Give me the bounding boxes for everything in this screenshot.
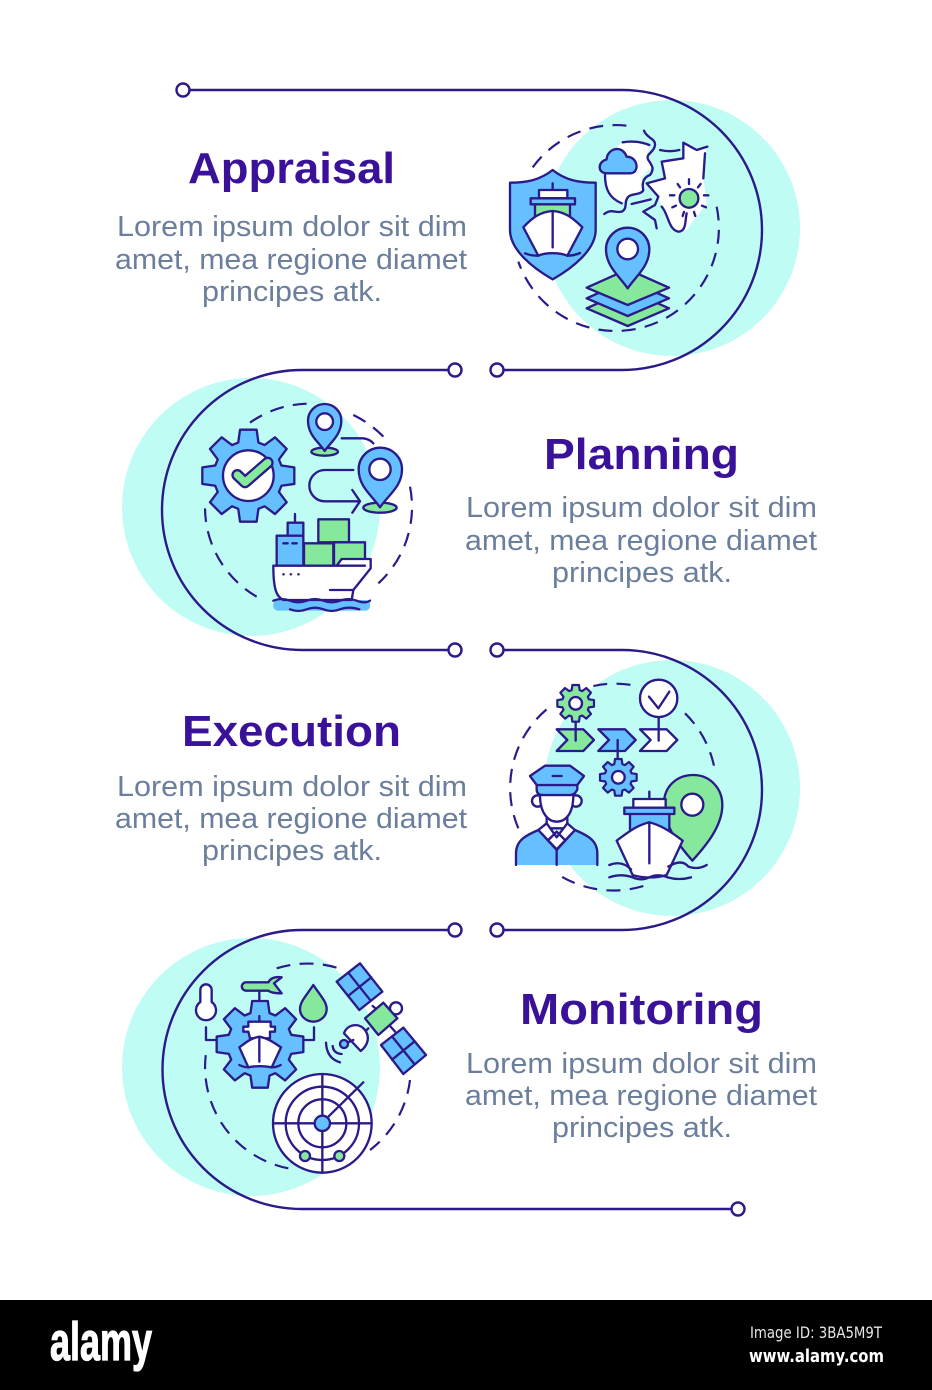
footer: watermark bar xyxy=(0,1300,932,1390)
icon: ship with green location pin xyxy=(609,775,722,879)
image id text: Image ID: 3BA5M9T xyxy=(750,1323,882,1342)
text block: Planning description: principes atk. xyxy=(552,557,732,589)
icon: gear with ship and sensors xyxy=(196,977,327,1088)
icon: route between pins xyxy=(308,404,402,513)
connector line with end nodes xyxy=(162,84,762,1216)
text block: Execution description: amet, mea regione diamet xyxy=(115,803,467,835)
heading: Appraisal: Appraisal xyxy=(188,144,395,193)
website text: www.alamy.com xyxy=(749,1346,884,1367)
icon: ship captain xyxy=(513,766,597,876)
text block: Appraisal description: Lorem ipsum dolor sit dim xyxy=(117,211,467,243)
text block: Monitoring description: amet, mea regione diamet xyxy=(465,1080,817,1112)
icon: radar xyxy=(273,1074,372,1173)
icon: container ship xyxy=(273,514,371,611)
icon: planning illustration xyxy=(202,404,412,611)
text block: Execution description: principes atk. xyxy=(202,835,382,867)
text block: Appraisal description xyxy=(115,211,467,308)
text block: Monitoring description: Lorem ipsum dolor sit dim xyxy=(466,1048,817,1080)
logo text: alamy xyxy=(50,1312,152,1372)
text block: Planning description xyxy=(465,492,817,589)
icon: satellite with dish xyxy=(326,963,426,1074)
text block: Monitoring description xyxy=(465,1048,817,1144)
icon: appraisal illustration xyxy=(510,125,719,331)
heading: Monitoring: Monitoring xyxy=(520,985,763,1034)
icon: execution illustration xyxy=(510,680,722,890)
icon: gear with check mark xyxy=(202,430,294,522)
panel: teal background circles xyxy=(122,100,800,1196)
text block: Appraisal description: amet, mea regione diamet xyxy=(115,244,467,276)
text block: Planning description: amet, mea regione diamet xyxy=(465,525,817,557)
text block: Appraisal description: principes atk. xyxy=(202,276,382,308)
text block: Execution description: Lorem ipsum dolor sit dim xyxy=(117,771,467,803)
heading: Execution: Execution xyxy=(182,707,401,756)
heading: Planning: Planning xyxy=(544,430,739,479)
text block: Monitoring description: principes atk. xyxy=(552,1112,732,1144)
icon: process chevrons with gears and check xyxy=(557,680,677,796)
icon: monitoring illustration xyxy=(196,963,426,1173)
icon: map with cloud and sun xyxy=(600,131,708,232)
icon: shield with ship xyxy=(510,170,596,279)
text block: Execution description xyxy=(115,771,467,867)
text block: Planning description: Lorem ipsum dolor sit dim xyxy=(466,492,817,524)
icon: location pin on layers xyxy=(587,228,669,326)
